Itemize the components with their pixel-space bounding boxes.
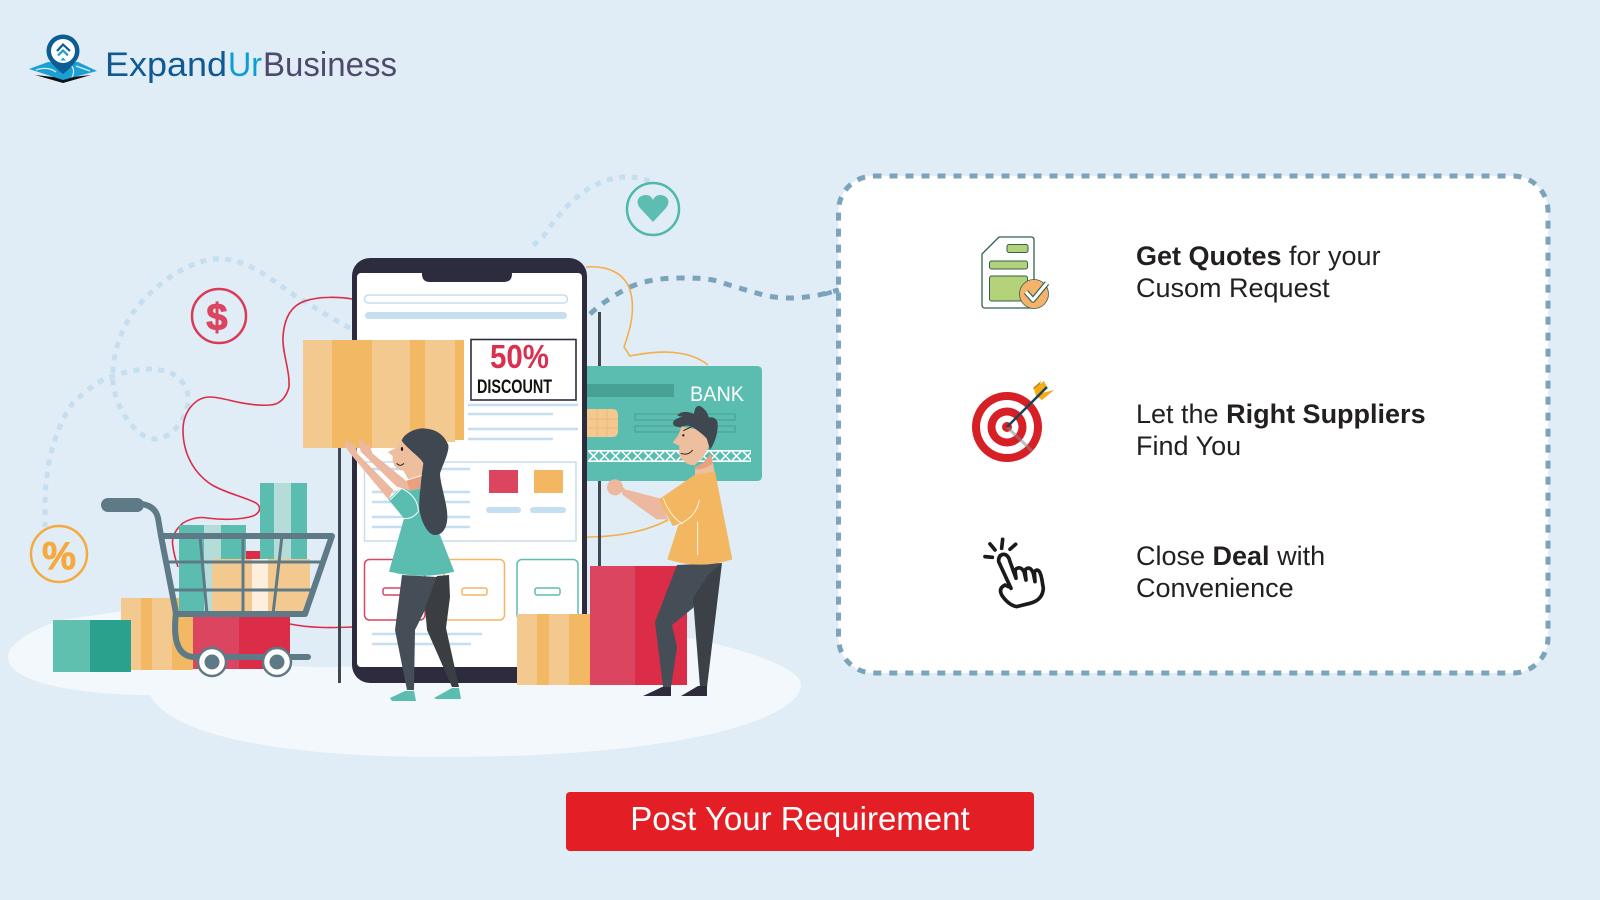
text: get quotes: Cusom Request [1136,273,1330,303]
discount sticker [471,338,576,400]
green box [53,620,131,672]
woman hair [402,428,448,535]
woman legs [395,575,459,690]
bank card [587,366,762,481]
large parcel [303,340,464,448]
orange curve line [586,267,708,537]
card stripe [588,450,751,462]
product card: red [364,560,425,620]
woman top [388,488,454,576]
cart contents [179,483,310,611]
product panel [364,462,576,541]
support pole right [598,312,601,566]
dashed path: light top trail [533,177,653,245]
man body [643,406,732,696]
button: post your requirement [566,792,1034,851]
man arm [607,479,668,519]
discount sticker: DISCOUNT [477,377,552,398]
logo [29,34,397,84]
man neck [695,453,715,476]
text: get quotes: Get Quotes for your [1136,241,1381,271]
icon: heart badge [627,183,679,235]
man shoes [643,686,707,696]
shopping cart [108,504,332,676]
dashed path: light left trail [45,259,350,527]
woman shoes [390,688,461,701]
red box [590,566,687,685]
man hair [673,406,718,450]
icon: quote document [982,237,1048,308]
text: right suppliers: Let the Right Suppliers [1136,399,1426,429]
logo wordmark: Business [263,46,397,84]
woman upper body [345,428,454,576]
man legs [655,563,722,687]
text lines [468,405,578,439]
bank label: BANK [690,382,745,406]
icon: target with arrow [972,381,1054,462]
red box [193,613,290,669]
red curve line [172,297,352,628]
text: right suppliers [1136,399,1426,461]
button: post your requirement: Post Your Requirement [630,800,970,837]
icon: dollar badge: $ [206,297,228,339]
search bar [364,295,568,303]
icon: tapping hand [985,539,1043,607]
logo wordmark [105,46,397,84]
cart wheels [198,648,291,676]
icon: percent badge [31,526,87,582]
orange box [517,614,590,685]
logo wordmark: Expand [105,46,227,84]
product card: orange [444,560,504,620]
shopping boxes: left stack [53,598,290,672]
text: close deal: Close Deal with [1136,541,1325,571]
ground shape [8,610,801,757]
icon: percent badge: % [42,535,76,578]
icon: dollar badge [192,289,246,343]
panel: benefits [838,176,1548,673]
man shirt [659,472,732,565]
footer lines [372,634,482,644]
logo wordmark: Ur [228,46,262,84]
woman neck [407,476,422,491]
man upper body [659,406,732,565]
discount sticker: 50% [490,338,549,375]
sleeve seam [390,488,418,519]
text: close deal: Convenience [1136,573,1294,603]
logo icon: map pin [29,34,97,83]
smartphone [352,258,587,683]
woman figure [345,428,461,701]
text: get quotes [1136,241,1381,303]
orange box [121,598,193,670]
woman arms [345,439,411,499]
text: right suppliers: Find You [1136,431,1241,461]
woman face [388,440,425,479]
card chip [587,409,618,437]
right boxes [517,566,687,685]
dashed connector to panel [590,278,838,314]
support pole left [338,448,341,683]
man face [673,427,711,465]
connector tail [825,290,839,294]
text: close deal [1136,541,1325,603]
product card: teal [517,560,578,620]
phone notch [422,273,512,282]
